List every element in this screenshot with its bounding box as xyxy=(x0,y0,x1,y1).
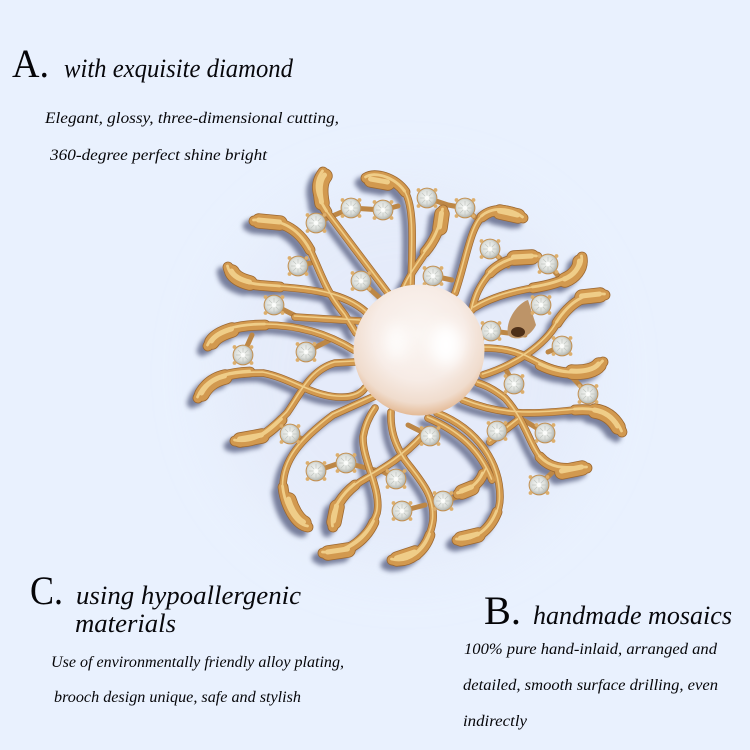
section B description xyxy=(463,641,718,730)
section A xyxy=(12,41,339,164)
section A description xyxy=(44,110,339,164)
section C description xyxy=(51,654,344,706)
section C description: brooch design unique, safe and stylish xyxy=(54,689,301,706)
section C heading: C. xyxy=(30,568,63,613)
background soft glow behind brooch xyxy=(215,185,595,565)
brooch pin clasp xyxy=(508,300,536,338)
section C heading: using hypoallergenic xyxy=(76,581,301,610)
section A heading: A. xyxy=(12,41,49,86)
section A heading xyxy=(12,41,294,86)
section B xyxy=(463,588,732,730)
section A description: 360-degree perfect shine bright xyxy=(49,147,268,164)
section B description: detailed, smooth surface drilling, even xyxy=(463,677,718,694)
section B heading: B. xyxy=(484,588,521,633)
brooch illustration xyxy=(192,171,622,566)
section A description: Elegant, glossy, three-dimensional cutting, xyxy=(44,110,339,127)
section B description: indirectly xyxy=(463,713,528,730)
section B heading: handmade mosaics xyxy=(533,601,732,630)
rhinestone diamonds xyxy=(233,188,598,521)
section B description: 100% pure hand-inlaid, arranged and xyxy=(464,641,718,658)
brooch cast shadow xyxy=(192,177,616,566)
section C xyxy=(30,568,344,706)
section C heading xyxy=(30,568,301,638)
gold branches xyxy=(198,171,622,561)
section B heading xyxy=(484,588,732,633)
gem stems xyxy=(243,198,588,511)
section C heading: materials xyxy=(75,609,176,638)
section C description: Use of environmentally friendly alloy plating, xyxy=(51,654,344,671)
central pearl xyxy=(354,284,484,416)
section A heading: with exquisite diamond xyxy=(64,54,294,83)
